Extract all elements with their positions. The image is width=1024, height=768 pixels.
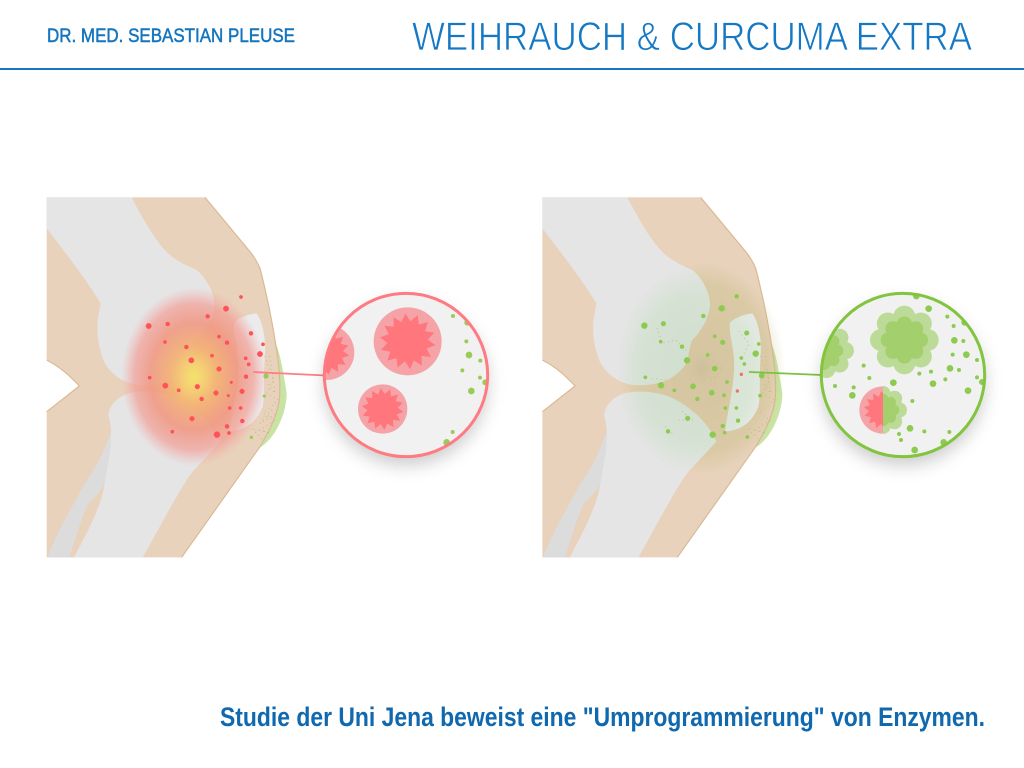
magnifier ring xyxy=(324,293,488,457)
half-converted cell: red half xyxy=(859,386,883,434)
patella xyxy=(229,313,265,432)
magnifier background xyxy=(324,293,488,457)
green dots xyxy=(250,373,269,439)
magnifier background xyxy=(821,293,985,457)
green particles xyxy=(641,294,764,439)
magnifier ring xyxy=(821,293,985,457)
green particles xyxy=(443,314,488,446)
magnifier: reprogrammed cells xyxy=(799,293,985,457)
green lump xyxy=(752,342,782,448)
small inflamed cell xyxy=(358,384,407,434)
tibia xyxy=(570,392,716,557)
fibula xyxy=(47,428,113,557)
clipped inflamed cell xyxy=(326,328,354,380)
pale green glow on bones xyxy=(627,279,760,460)
clipped cell contents xyxy=(326,307,486,445)
header rule xyxy=(0,68,1024,70)
femur xyxy=(47,197,214,385)
header author name: DR. MED. SEBASTIAN PLEUSE xyxy=(47,25,295,47)
skin xyxy=(542,197,776,557)
remaining red particles xyxy=(736,373,743,393)
tibia xyxy=(74,392,221,557)
green lump xyxy=(257,342,287,448)
connector line: left xyxy=(253,372,326,376)
magnifier: inflamed cells xyxy=(299,293,488,457)
patella xyxy=(725,313,761,432)
stipple xyxy=(652,302,774,440)
large inflamed cell xyxy=(374,307,442,375)
green particles xyxy=(833,293,985,453)
skin contour xyxy=(47,197,280,557)
femur xyxy=(542,197,710,385)
left knee: inflamed joint xyxy=(47,197,287,557)
right knee: treated joint xyxy=(542,197,786,557)
stipple xyxy=(252,357,278,440)
skin xyxy=(47,197,280,557)
half-converted cell: green half xyxy=(883,386,907,434)
inflammation glow xyxy=(121,287,267,466)
fibula xyxy=(543,428,609,557)
large green cell xyxy=(870,306,939,374)
skin contour xyxy=(542,197,776,557)
connector line: right xyxy=(749,372,822,375)
olive glow on tissue xyxy=(619,262,786,475)
clipped cell contents xyxy=(799,293,985,453)
inflammatory cell dots xyxy=(146,295,265,438)
clipped green cell xyxy=(822,328,854,378)
